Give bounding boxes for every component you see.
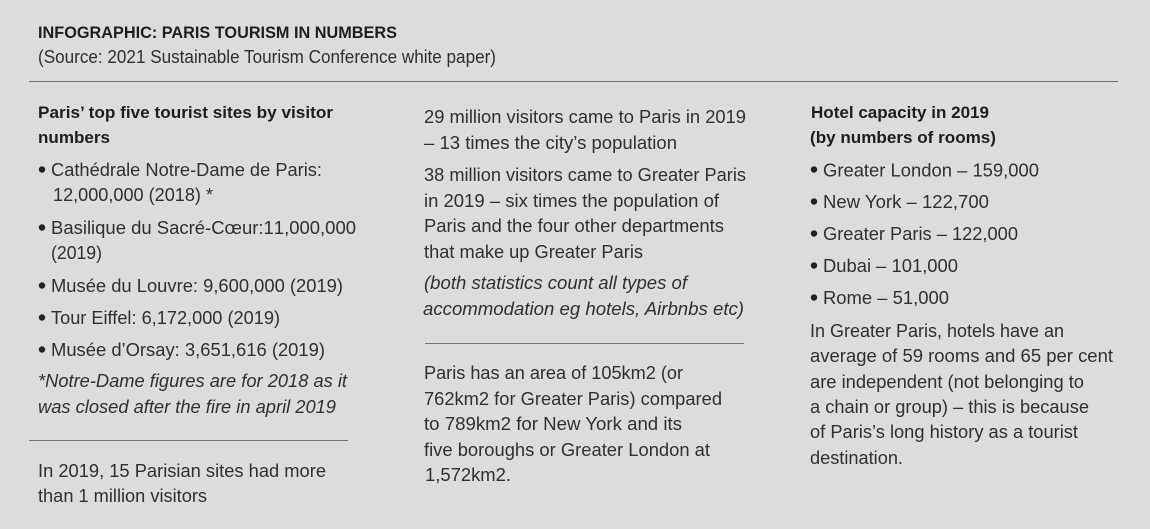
list item: Notre-Dame (39, 160, 322, 205)
panel: hotel capacity (810, 103, 1113, 468)
text block: visitors to Greater Paris: that make up Greater Paris (424, 242, 643, 262)
text block: area comparison: to 789km2 for New York and its (424, 414, 682, 434)
title: INFOGRAPHIC: PARIS TOURISM IN NUMBERS (38, 23, 397, 42)
note: accommodation types: (both statistics count all types of (424, 273, 689, 293)
list item: Dubai: Dubai – 101,000 (823, 256, 958, 276)
text block: visitors to Greater Paris: Paris and the four other departments (424, 216, 724, 236)
text block: Parisian sites (38, 461, 326, 506)
list item: Eiffel: Tour Eiffel: 6,172,000 (2019) (51, 308, 280, 328)
footnote: Notre-Dame figures: *Notre-Dame figures are for 2018 as it (38, 371, 348, 391)
list item: Notre-Dame: Cathédrale Notre-Dame de Paris: (51, 160, 322, 180)
text block: visitors to Greater Paris: in 2019 – six times the population of (424, 191, 720, 211)
text block: Greater Paris hotels: a chain or group) – this is because (810, 397, 1089, 417)
text block: Greater Paris hotels: average of 59 rooms and 65 per cent (810, 346, 1113, 366)
text block: visitors to Paris: – 13 times the city’s population (424, 133, 677, 153)
list item: Greater Paris: Greater Paris – 122,000 (823, 224, 1018, 244)
list item: Louvre: Musée du Louvre: 9,600,000 (2019) (51, 276, 343, 296)
footnote: Notre-Dame figures (38, 371, 348, 417)
text block: Parisian sites: In 2019, 15 Parisian sites had more (38, 461, 326, 481)
header: title and source (38, 23, 496, 67)
text block: area comparison: 762km2 for Greater Paris) compared (424, 389, 722, 409)
text block: Greater Paris hotels: of Paris’s long history as a tourist (810, 422, 1078, 442)
panel: visitors and area (423, 107, 746, 485)
list item: Rome: Rome – 51,000 (823, 288, 949, 308)
footnote: Notre-Dame figures: was closed after the fire in april 2019 (38, 397, 336, 417)
heading: top five tourist sites (38, 103, 333, 147)
text block: visitors to Greater Paris (424, 165, 746, 262)
text block: Parisian sites: than 1 million visitors (38, 486, 207, 506)
text block: visitors to Paris: 29 million visitors came to Paris in 2019 (424, 107, 746, 127)
list item: Sacré-Cœur (39, 218, 356, 263)
list item: Greater London: Greater London – 159,000 (823, 160, 1039, 180)
text block: area comparison: five boroughs or Greater London at (424, 440, 710, 460)
heading: hotel capacity (810, 103, 996, 147)
note: accommodation types (423, 273, 744, 319)
heading: hotel capacity: Hotel capacity in 2019 (811, 103, 989, 122)
text block: area comparison: 1,572km2. (425, 465, 511, 485)
note: accommodation types: accommodation eg hotels, Airbnbs etc) (423, 299, 744, 319)
text block: Greater Paris hotels: destination. (810, 448, 903, 468)
list item: New York: New York – 122,700 (823, 192, 989, 212)
text block: area comparison (424, 363, 722, 485)
text block: visitors to Greater Paris: 38 million visitors came to Greater Paris (424, 165, 746, 185)
list item: Notre-Dame: 12,000,000 (2018) * (53, 185, 213, 205)
text block: Greater Paris hotels: are independent (not belonging to (810, 372, 1084, 392)
heading: top five tourist sites: numbers (38, 128, 110, 147)
heading: hotel capacity: (by numbers of rooms) (810, 128, 996, 147)
text block: area comparison: Paris has an area of 105km2 (or (424, 363, 683, 383)
heading: top five tourist sites: Paris’ top five tourist sites by visitor (38, 103, 333, 122)
text block: visitors to Paris (424, 107, 746, 153)
list item: Sacré-Cœur: Basilique du Sacré-Cœur:11,000,000 (51, 218, 356, 238)
text block: Greater Paris hotels: In Greater Paris, hotels have an (810, 321, 1064, 341)
list item: Orsay: Musée d’Orsay: 3,651,616 (2019) (51, 340, 325, 360)
list item: Sacré-Cœur: (2019) (51, 243, 102, 263)
panel: top five tourist sites (38, 103, 356, 506)
source line: (Source: 2021 Sustainable Tourism Conference white paper) (38, 47, 496, 67)
text block: Greater Paris hotels (810, 321, 1113, 468)
